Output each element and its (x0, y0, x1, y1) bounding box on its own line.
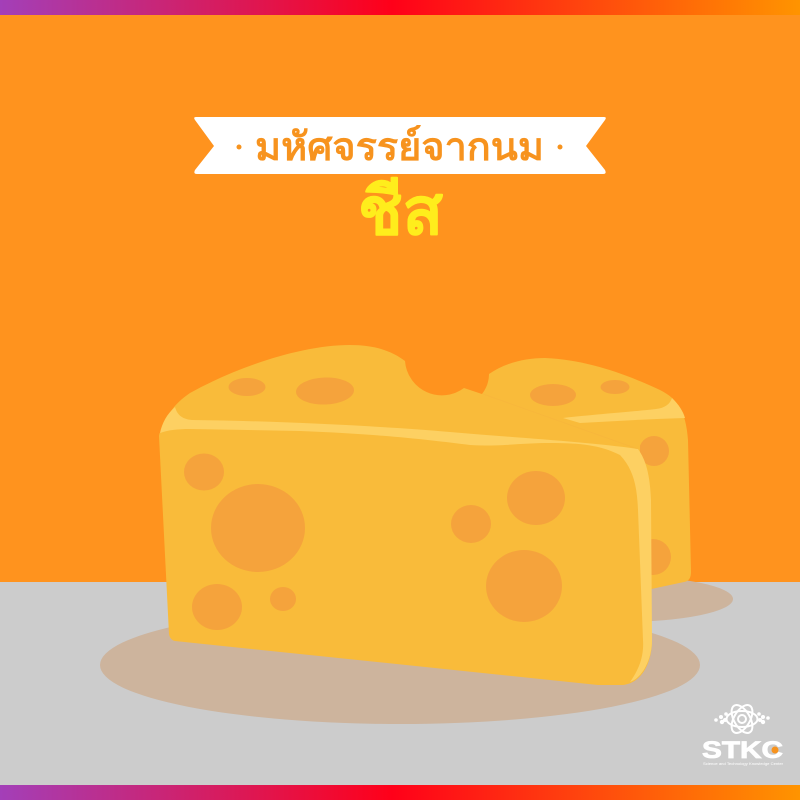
front hole 2 (211, 484, 305, 572)
ribbon dot right (558, 144, 562, 150)
wedge seam line (483, 394, 638, 449)
cheese shadow: front (100, 606, 700, 724)
front face of cheese (159, 429, 652, 685)
ribbon heading: มหัศจรรย์จากนม (255, 124, 544, 169)
ribbon shape (194, 117, 606, 174)
front hole 7 (486, 550, 562, 622)
back hole lower (651, 539, 671, 575)
front hole 1 (184, 454, 224, 490)
main title: ชีส (358, 174, 444, 248)
logo orange dot (772, 746, 778, 754)
background: orange wall (0, 0, 800, 582)
STKC logo (702, 702, 784, 766)
front hole 5 (451, 505, 491, 543)
front hole 6 (507, 471, 565, 525)
front hole 3 (192, 584, 242, 630)
cheese back wedge and top (165, 345, 691, 600)
top hole 4 (600, 380, 630, 394)
logo dots (714, 712, 770, 724)
front rim highlight (160, 407, 652, 682)
top hole 2 (296, 376, 354, 406)
back rim highlight (563, 398, 685, 423)
front hole 4 (270, 587, 296, 611)
bottom gradient bar (0, 785, 800, 800)
logo atom icon (726, 702, 758, 736)
cheese shadow: back (507, 576, 733, 622)
top hole 3 (530, 384, 576, 406)
ribbon dot left (236, 144, 242, 150)
logo caption: Science and Technology Knowledge Center (703, 761, 784, 766)
background: grey table (0, 582, 800, 800)
top hole 1 (228, 378, 266, 396)
back side holes (640, 436, 671, 575)
top gradient bar (0, 0, 800, 15)
logo wordmark: STKC (702, 737, 783, 764)
back hole upper (639, 436, 669, 466)
title ribbon (194, 117, 606, 174)
cheese illustration (159, 345, 691, 685)
